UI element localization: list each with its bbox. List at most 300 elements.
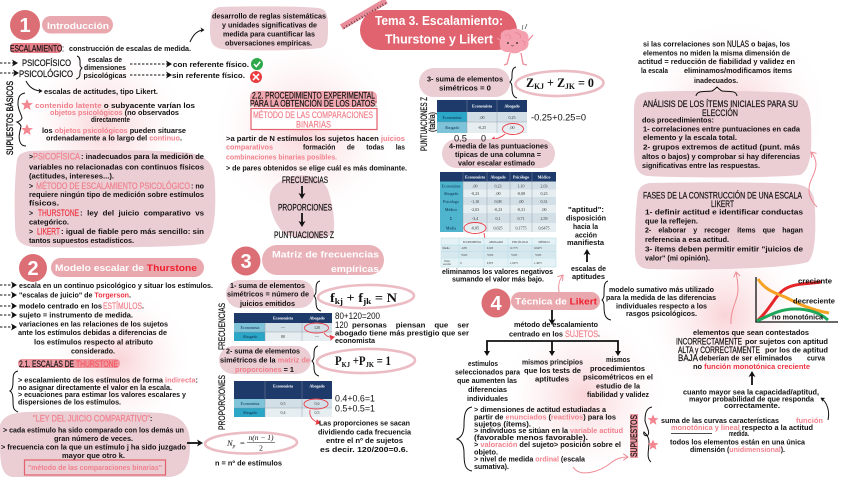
correlaciones nulas text: elementos no miden la misma dimensión de	[643, 50, 790, 58]
formula: ZKJ + ZJK = 0: = 0	[575, 76, 594, 90]
note: proporciones	[318, 420, 411, 454]
panel: fases de la construcción: 3- ítems deben permitir emitir "juicios de	[645, 246, 803, 254]
panel: análisis de los ítems: ELECCIÓN	[702, 108, 738, 118]
table: proporciones: Economista	[273, 384, 293, 388]
panel: comparación de métodos: : igual de fiable pero más sencillo: sin	[61, 229, 204, 236]
model list: "escalas de juicio" de Torgerson.	[19, 292, 131, 300]
procedure text: >a partir de N estímulos los sujetos hacen juicios	[226, 136, 405, 143]
pink arrow	[559, 275, 563, 292]
values 0.5 and 0: 0.5	[454, 134, 467, 144]
aptitud definition: "aptitud":	[568, 207, 604, 214]
panel: análisis de los ítems: altos o bajos) y comprobar si hay diferencias	[642, 154, 800, 161]
branch: estímulos: diferencias	[468, 387, 507, 394]
supuesto 2 text	[42, 128, 186, 142]
panel: comparación de métodos: : inadecuados para la medición de	[81, 154, 204, 161]
formula: fkj + fjk = N: + f	[343, 291, 364, 305]
table: valores ajustados: escalar	[443, 263, 451, 266]
table: proporciones: 0,5	[314, 410, 320, 416]
arrow down	[551, 310, 553, 323]
section 2.2: procedimiento experimental	[226, 90, 407, 240]
escalas de actitudes: escalas de actitudes, tipo Likert.	[44, 89, 158, 96]
panel: ley del juicio comparativo: gran número de veces.	[54, 436, 133, 443]
panel: análisis de los ítems	[634, 87, 811, 177]
red arrow to explanation	[324, 333, 334, 337]
cuanto mayor text: cuanto mayor sea la capacidad/aptitud,	[683, 390, 819, 396]
escalamiento definition	[10, 43, 191, 54]
vertical label: puntuaciones z: PUNTUACIONES Z	[419, 97, 429, 151]
panel: análisis de los ítems: 2- grupos extremos de actitud (punt. más	[643, 144, 800, 152]
note: eliminamos negativos: eliminamos los valores negativos	[442, 269, 553, 276]
chart: curvas monotónicas: creciente	[798, 278, 832, 286]
incorrectamente text: INCORRECTAMENTE	[676, 336, 742, 346]
explanation: 80+120=200: abogado tiene más prestigio que ser	[335, 330, 469, 338]
branch: mismos principios	[522, 360, 583, 384]
equation: -0.25+0.25=0: -0.25+0.25=0	[531, 112, 586, 122]
modelo sumativo text: individuales respecto a los	[616, 304, 707, 310]
pill: paso 1	[226, 280, 314, 308]
table: valores ajustados: Valor	[444, 260, 450, 263]
table: valor escalar: Médico	[445, 207, 457, 212]
table: proporciones: Abogado	[243, 410, 257, 415]
title text: Thurstone y Likert	[385, 32, 494, 46]
2.1 text	[18, 378, 198, 406]
psicofísico / psicológico branches	[0, 56, 82, 79]
table: valores ajustados: -0,85	[461, 247, 468, 250]
model list: ESTÍMULOS	[103, 301, 142, 311]
table: valor escalar: Media	[446, 226, 456, 230]
table: valores ajustados: +0,85	[511, 254, 518, 257]
modelo sumativo text: para la medida de las diferencias	[606, 295, 716, 302]
model list: escala en un continuo psicológico y situar los estímulos.	[19, 283, 213, 290]
correlaciones nulas text: si las correlaciones son	[643, 42, 725, 48]
branch: mismos procedimientos	[583, 357, 653, 399]
table: valores ajustados: MÉDICO	[538, 241, 550, 244]
values 0.5 and 0: 0	[481, 134, 486, 144]
pink arrow to supuestos	[573, 457, 628, 473]
table: valores ajustados: 0,6475	[534, 247, 542, 250]
table: puntuaciones z: Abogado	[445, 125, 459, 130]
panel: análisis de los ítems: 1- correlaciones entre puntuaciones en cada	[643, 126, 800, 134]
heading: técnica de Likert: Técnica de Likert	[515, 296, 598, 308]
subheading 2.1: THURSTONE	[76, 359, 118, 369]
escalas de dimensiones psicológicas: dimensiones	[84, 65, 126, 72]
box: método de las comparaciones binarias	[251, 108, 377, 130]
model list: considerado.	[71, 348, 115, 356]
heading: matriz de frecuencias empíricas	[262, 245, 384, 275]
panel: fases de la construcción: 1- definir actitud e identificar conductas	[645, 210, 803, 216]
red arrow to media	[491, 134, 505, 140]
procedure text: > de pares obtenidos se elige cuál es más dominante.	[226, 166, 407, 172]
note: eliminamos negativos: sumando el valor más bajo.	[452, 276, 544, 284]
equations: 0.4+0.6, 0.5+0.5	[335, 394, 375, 414]
table: valores ajustados: PSICÓLOGO	[512, 241, 528, 244]
supuesto: función monotónica: función	[796, 418, 823, 425]
section 3: matriz de frecuencias empíricas	[205, 245, 469, 468]
table: valor escalar: -0,31	[517, 207, 525, 213]
box: método de las comparaciones binarias: MÉTODO DE LAS COMPARACIONES	[253, 110, 373, 120]
formula: Np	[205, 432, 297, 454]
table: puntuaciones z: ,00	[510, 125, 514, 131]
chart: curvas monotónicas: decreciente	[793, 298, 835, 306]
pill: paso 3: simétricos = 0	[439, 86, 491, 92]
tree connector	[487, 341, 618, 353]
incorrectamente text: elementos que sean contestados	[693, 330, 809, 337]
red arrow to adjusted table	[484, 233, 486, 263]
formula: Np: =	[240, 438, 245, 448]
aptitud definition: disposición	[566, 216, 606, 222]
table: valores ajustados: +0,85	[487, 254, 494, 257]
panel: desarrollo de reglas: desarrollo de reglas sistemáticas	[212, 14, 326, 20]
explanation: 80+120=200	[335, 311, 469, 345]
number badge 1: 1	[19, 15, 31, 37]
icon: brain character	[497, 24, 533, 65]
table: frecuencias: Economista	[241, 325, 260, 330]
formula: PKJ + PJK = 1	[317, 348, 415, 374]
number badge 2: 2	[27, 258, 39, 280]
formula: Np: p	[232, 444, 236, 450]
likert details text: objeto.	[474, 450, 498, 456]
model list: los estímulos respecto al atributo	[34, 340, 153, 346]
aptitud definition	[566, 207, 606, 247]
table: valor escalar: 0,025	[494, 226, 502, 232]
icon: ruler	[340, 0, 388, 30]
heading: Modelo escalar de Thurstone: Modelo escalar de Thurstone	[55, 263, 197, 274]
formula: ZKJ + ZJK = 0: Z	[526, 76, 534, 90]
correlaciones nulas text: NULAS	[727, 39, 749, 49]
model list: ante los estímulos debidas a diferencias de	[18, 330, 167, 337]
table: puntuaciones z: 0,25	[508, 115, 516, 121]
title pill	[360, 10, 517, 50]
subheading 2.2: PARA LA OBTENCIÓN DE LOS DATOS:	[250, 98, 377, 108]
branch: mismos procedimientos: fiabilidad y validez	[587, 392, 650, 399]
table: valor escalar: Economista	[442, 184, 461, 188]
number badge 3	[232, 246, 260, 276]
procedure text	[226, 136, 407, 172]
método centrado en sujetos: .	[598, 332, 600, 338]
panel: ley del juicio comparativo: mayor que otro k.	[62, 453, 125, 460]
table: proporciones: 0,6	[314, 401, 320, 407]
heading: técnica de Likert	[511, 292, 600, 310]
panel: fases de la construcción: LIKERT	[711, 199, 734, 209]
incorrectamente text	[676, 330, 828, 371]
number badge 2	[19, 254, 47, 282]
sin referente físico: sin referente físico.	[172, 73, 245, 80]
table: valores ajustados: ABOGADO	[489, 241, 503, 244]
star	[648, 440, 658, 450]
correlaciones nulas text: la escala	[641, 68, 668, 75]
sin referente físico	[130, 71, 262, 83]
vertical label: puntuaciones z	[419, 97, 437, 151]
model list: .	[142, 304, 144, 310]
likert details text: > valoración del sujeto> posición sobre el	[474, 442, 621, 449]
supuesto 1 text: directamente	[91, 117, 130, 124]
2.1 text: no asignar directamente el valor en la escala.	[18, 385, 172, 392]
star	[648, 414, 658, 425]
formula: fkj + fjk = N: = N	[371, 291, 397, 305]
formula: ZKJ + ZJK = 0: JK	[565, 82, 576, 91]
panel: comparación de métodos: >	[29, 229, 33, 236]
arrow to definition panel	[190, 30, 204, 42]
procedure text: formación de todas las	[303, 144, 405, 152]
correlaciones nulas text: actitud = reducción de fiabilidad y validez en	[638, 59, 795, 66]
panel: comparación de métodos: >	[29, 184, 33, 190]
panel: comparación de métodos: >	[29, 154, 33, 161]
brace 2.1	[10, 371, 18, 412]
correlaciones nulas text: eliminamos/modificamos ítems	[684, 68, 792, 75]
table: puntuaciones z	[437, 100, 527, 134]
branch: mismos principios: mismos principios	[522, 360, 583, 366]
panel: comparación de métodos: : ley del juicio comparativo vs	[80, 210, 204, 218]
pink arrow between panels	[809, 152, 817, 207]
table: valor escalar: 1,10	[518, 184, 524, 190]
panel: ley del juicio comparativo: :	[150, 416, 152, 423]
table: valor escalar: -0,85	[471, 226, 479, 232]
vertical label: proporciones: PROPORCIONES	[217, 375, 227, 430]
table: valor escalar: 0,23	[494, 184, 502, 190]
table: valor escalar: ,00	[472, 184, 478, 190]
table: frecuencias: ---	[281, 325, 286, 330]
table: valores ajustados	[441, 238, 556, 267]
psicofísico / psicológico branches: PSICOFÍSICO	[22, 58, 71, 68]
title banner	[340, 0, 533, 65]
pill: paso 2	[219, 346, 311, 374]
table: valores ajustados: 0,1775	[510, 247, 518, 250]
likert details text: partir de enunciados (reactivos ) para los	[474, 414, 616, 422]
panel: fases de la construcción: FASES DE LA CONSTRUCCIÓN DE UNA ESCALA	[643, 190, 802, 200]
table: valores ajustados: 0,025	[487, 247, 494, 250]
incorrectamente text: curva	[807, 356, 825, 362]
panel: análisis de los ítems: dos procedimientos:	[642, 118, 714, 124]
brace	[314, 281, 321, 311]
branch: mismos procedimientos: psicométricos en el	[583, 374, 653, 382]
formula: fkj + fjk = N: kj	[335, 297, 343, 306]
aptitud definition: acción	[575, 232, 597, 240]
incorrectamente text: no función monotónica creciente	[693, 364, 810, 371]
modelo sumativo text: modelo sumativo más utilizado	[609, 287, 714, 294]
table: frecuencias: ---	[315, 334, 320, 339]
table: valor escalar: 0,08	[494, 199, 502, 205]
likert details text: sumativa).	[474, 464, 509, 471]
table: valor escalar: Abogado	[444, 191, 458, 196]
panel: desarrollo de reglas: y unidades significativas de	[222, 22, 317, 30]
red arrow to note	[310, 410, 320, 423]
escalas de actitudes	[26, 81, 158, 96]
vertical label: frecuencias: FRECUENCIAS	[217, 303, 227, 350]
explanation: 80+120=200: personas piensan que ser	[352, 322, 469, 330]
pill: paso 2: proporciones = 1	[235, 367, 294, 374]
table: valor escalar: -0,23	[471, 191, 479, 197]
star 1	[21, 99, 33, 110]
equations: 0.4+0.6, 0.5+0.5: 0.5+0.5=1	[335, 404, 375, 414]
2.1 text: > escalamiento de los estímulos de forma indirecta :	[18, 378, 198, 384]
panel: fases de la construcción	[635, 182, 815, 269]
formula: PKJ + PJK = 1: JK	[366, 360, 374, 369]
escalas de aptitudes: aptitudes	[572, 274, 605, 281]
formula: Np: n(n − 1)	[248, 433, 274, 442]
table: valor escalar: Σ	[450, 216, 453, 221]
escalamiento definition: ESCALAMIENTO:	[10, 44, 64, 54]
brace	[312, 346, 319, 376]
supuestos brace	[17, 93, 26, 146]
table: frecuencias: 120	[314, 325, 320, 330]
note: n = nº de estímulos: n = nº de estímulos	[215, 460, 282, 468]
number badge 3: 3	[240, 251, 252, 273]
heading: matriz de frecuencias empíricas: Matriz de frecuencias	[272, 250, 379, 260]
método centrado en sujetos: centrado en los	[509, 332, 563, 338]
heading: Introducción	[42, 16, 113, 34]
escalas de dimensiones psicológicas: psicológicas	[84, 73, 127, 80]
likert details text: > individuos se sitúan en la variable actitud	[474, 428, 623, 435]
arrow to formula	[187, 442, 201, 444]
table: frecuencias: 80	[281, 334, 285, 339]
método centrado en sujetos: SUJETOS	[565, 329, 598, 339]
formula: PKJ + PJK = 1: = 1	[374, 354, 391, 368]
blob and flow: frecuencias, proporciones, puntuaciones z: PROPORCIONES	[278, 202, 332, 212]
procedure text: comparativos	[226, 144, 273, 152]
chart: curvas monotónicas: no monotónica	[772, 314, 823, 322]
aptitud note	[559, 207, 606, 292]
supuesto 1 text: contenido latente o subyacente varían los	[35, 103, 195, 110]
heading: matriz de frecuencias empíricas: empíricas	[331, 264, 379, 275]
supuesto: función monotónica: monotónica y lineal respecto a la actitud	[671, 425, 813, 432]
explanation: 80+120=200: economista	[335, 338, 375, 345]
branch: mismos procedimientos: procedimientos	[590, 366, 645, 373]
table: valor escalar: 0,1775	[516, 226, 526, 232]
panel: comparación de métodos	[15, 150, 215, 248]
método centrado en sujetos	[509, 322, 600, 339]
panel: análisis de los ítems: significativas entre las respuestas.	[642, 163, 760, 170]
table: puntuaciones z: Economista	[443, 115, 462, 120]
panel: ley del juicio comparativo: "método de las comparaciones binarias"	[28, 465, 162, 472]
star 2	[21, 124, 33, 135]
table: valor escalar: 0,6475	[538, 226, 550, 232]
incorrectamente text: deberían de ser eliminados	[699, 356, 792, 362]
aptitud definition: hacia la	[573, 224, 598, 231]
panel: comparación de métodos: : no	[191, 184, 204, 190]
brace	[602, 281, 611, 320]
supuesto 1 text	[35, 103, 195, 124]
table: proporciones: Abogado	[309, 384, 325, 388]
pill: paso 3	[419, 68, 510, 97]
formula: PKJ + PJK = 1: P	[335, 354, 343, 368]
con referente físico: con referente físico.	[173, 62, 249, 69]
vertical label: supuestos: SUPUESTOS	[629, 415, 639, 457]
panel: ley del juicio comparativo: > cada estímulo ha sido comparado con los demás un	[3, 428, 184, 434]
formula: fkj + fjk = N: jk	[362, 297, 372, 306]
panel: ley del juicio comparativo	[0, 411, 190, 477]
pink arrow to fases	[731, 272, 738, 324]
table: valores ajustados: ECONOMISTA	[463, 241, 481, 244]
panel: desarrollo de reglas	[210, 6, 328, 50]
table: valores ajustados: 1,0275	[510, 262, 518, 265]
vertical label: supuestos básicos: SUPUESTOS BÁSICOS	[5, 81, 15, 155]
branch: estímulos	[455, 361, 520, 403]
table: valor escalar: 2,03	[540, 184, 548, 190]
cuanto mayor text	[683, 390, 819, 410]
table: valor escalar: -0,23	[494, 207, 502, 213]
panel: desarrollo de reglas: medida para cuantificar las	[223, 32, 315, 38]
pill: paso 2: simétricos de la matriz de	[220, 358, 310, 364]
heading: Modelo escalar de Thurstone	[51, 258, 204, 277]
subheading 2.2: 2.2. PROCEDIMIENTO EXPERIMENTAL	[252, 90, 375, 100]
puntuaciones z	[419, 67, 604, 284]
modelo sumativo text: rasgos psicológicos.	[626, 311, 697, 318]
branch: estímulos: que aumenten las	[457, 378, 517, 385]
table: valor escalar: 0,1	[496, 216, 500, 222]
pill: paso 2: 2- suma de elementos	[226, 348, 300, 356]
panel: análisis de los ítems: elemento y la escala total.	[643, 135, 737, 142]
modelo sumativo text	[606, 287, 716, 318]
note: proporciones: es decir. 120/200=0.6.	[320, 447, 408, 454]
table: valor escalar: 0,23	[540, 191, 548, 197]
table: valor escalar: -3,4	[472, 216, 478, 222]
table: valores ajustados: Media	[442, 247, 450, 250]
supuesto: unidimensional	[670, 440, 805, 454]
panel: comparación de métodos: MÉTODO DE ESCALAMIENTO PSICOLÓGICO	[36, 181, 190, 191]
branch: estímulos: individuales	[467, 396, 508, 403]
table: proporciones	[234, 381, 332, 417]
supuesto: función monotónica: medida.	[729, 431, 749, 438]
escalamiento definition: construcción de escalas de medida.	[69, 46, 191, 53]
table: valor escalar: Abogado	[490, 174, 506, 180]
table: valores ajustados: 0,875	[487, 262, 494, 265]
panel: comparación de métodos: categórico.	[29, 220, 69, 226]
panel: comparación de métodos: tantos supuestos estadísticos.	[29, 238, 134, 245]
blob and flow: frecuencias, proporciones, puntuaciones z: FRECUENCIAS	[282, 175, 328, 185]
title text: Tema 3. Escalamiento:	[375, 13, 503, 28]
blob and flow: frecuencias, proporciones, puntuaciones z	[270, 175, 334, 240]
incorrectamente text: ALTA y CORRECTAMENTE	[678, 345, 760, 355]
pill: paso 1: juicios emitidos	[239, 301, 295, 308]
table: valores ajustados: +0,85	[535, 254, 542, 257]
chart: curvas monotónicas	[756, 277, 838, 322]
panel: comparación de métodos: PSICOFÍSICA	[33, 152, 80, 162]
number badge 4	[482, 288, 510, 318]
table: puntuaciones z: Economista	[472, 104, 492, 108]
number badge 1	[10, 10, 40, 40]
formula: ZKJ + ZJK = 0	[515, 70, 604, 97]
correlaciones nulas text: o bajas, los	[751, 42, 790, 48]
table: valores ajustados: 0	[460, 262, 462, 265]
model list: variaciones en las relaciones de los sujetos	[19, 322, 168, 328]
incorrectamente text: por los de aptitud	[765, 348, 828, 354]
panel: fases de la construcción: valor" (mi opinión).	[645, 256, 710, 262]
vertical label: puntuaciones z: (tabla)	[427, 112, 437, 132]
branch: mismos principios: que los tests de	[524, 368, 581, 375]
formula: Np: N	[227, 438, 233, 448]
table: frecuencias: Abogado	[309, 316, 325, 320]
model list: modelo centrado en los	[19, 304, 102, 310]
arrow up	[586, 251, 588, 262]
table: valor escalar	[440, 172, 556, 234]
2.1 text: > ecuaciones para estimar los valores escalares y	[18, 392, 186, 399]
section 4: técnica de Likert	[455, 281, 716, 473]
table: frecuencias: Abogado	[243, 334, 257, 339]
panel: comparación de métodos: THURSTONE	[38, 208, 79, 218]
supuesto 1 text: objetos psicológicos (no observados	[50, 110, 179, 117]
heading: Introducción: Introducción	[47, 21, 109, 32]
pill: paso 4: 4-media de las puntuaciones	[449, 144, 548, 150]
table: valor escalar: ,00	[496, 191, 500, 197]
panel: desarrollo de reglas: obversaciones empíricas.	[225, 40, 312, 48]
note: proporciones: dividiendo cada frecuencia	[318, 430, 411, 436]
panel: comparación de métodos: variables no relacionadas con continuos físicos	[29, 164, 204, 172]
arrow up	[751, 373, 753, 385]
con referente físico	[130, 58, 263, 70]
pill: paso 4	[442, 139, 555, 168]
aptitud definition: manifiesta	[567, 240, 604, 247]
explanation: 80+120=200: 80+120=200	[335, 311, 380, 321]
